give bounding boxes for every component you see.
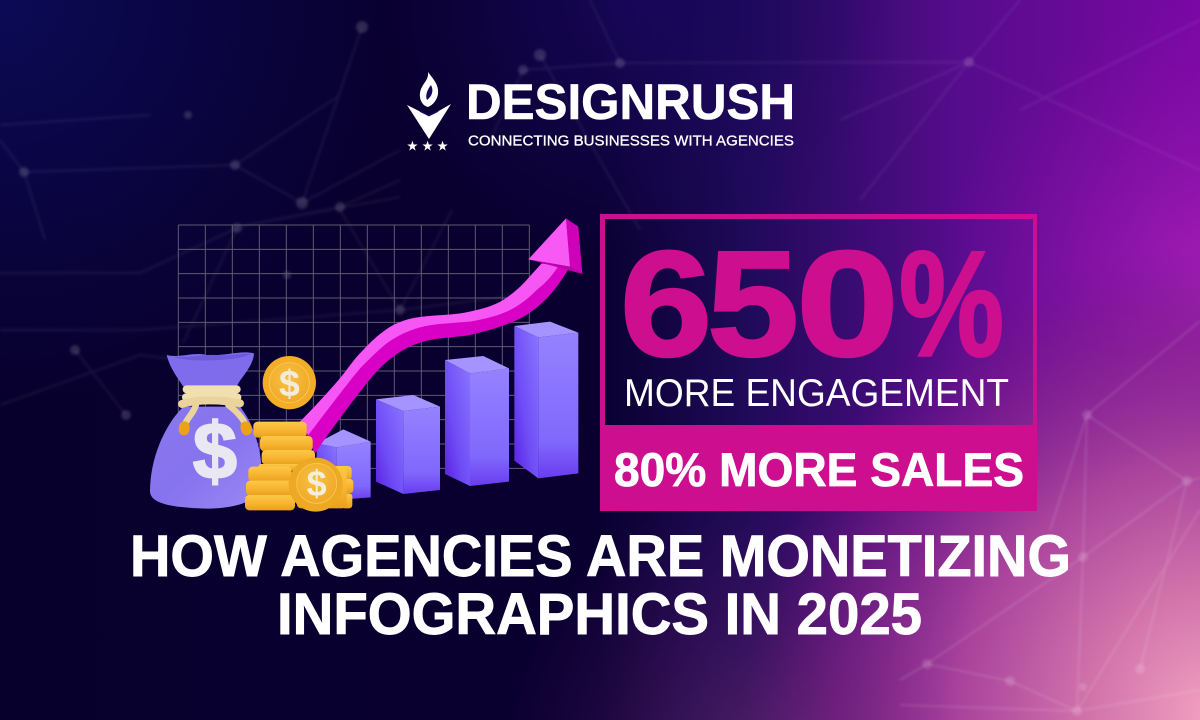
bar 4	[514, 322, 578, 478]
band: 80% more sales: 80% MORE SALES	[614, 443, 1024, 496]
bar 2	[376, 395, 440, 494]
panel frame	[600, 214, 1037, 425]
logo	[406, 72, 795, 154]
wordmark: DESIGNRUSH	[466, 74, 795, 130]
stat: 650%: 0	[796, 220, 899, 388]
label: more engagement: MORE ENGAGEMENT	[624, 372, 1009, 415]
stat: 650%: %	[899, 220, 1004, 388]
title line 2: INFOGRAPHICS IN 2025	[277, 582, 922, 647]
stat: 650%	[620, 220, 1004, 388]
arrow	[300, 218, 582, 453]
stat: 650%: 6	[620, 220, 712, 388]
floating coin	[263, 356, 316, 409]
icon: flame and V emblem	[407, 72, 451, 139]
icon: three stars: ★★★	[406, 138, 452, 154]
tagline: CONNECTING BUSINESSES WITH AGENCIES	[468, 132, 794, 150]
bar 1	[317, 429, 371, 500]
stat panel	[600, 214, 1037, 511]
band: 80% more sales	[600, 425, 1037, 511]
title line 1: HOW AGENCIES ARE MONETIZING	[130, 524, 1071, 589]
chart grid	[178, 225, 529, 468]
title	[130, 524, 1071, 647]
money bag	[150, 352, 262, 509]
bar 3	[445, 356, 509, 486]
illustration: growth chart with money	[150, 218, 582, 512]
stat: 650%: 5	[707, 220, 799, 388]
coin stack	[245, 422, 353, 510]
floating coin: $	[279, 362, 300, 404]
front coin: $	[307, 463, 327, 504]
dollar sign on bag: $	[193, 407, 237, 496]
front coin	[289, 458, 343, 512]
